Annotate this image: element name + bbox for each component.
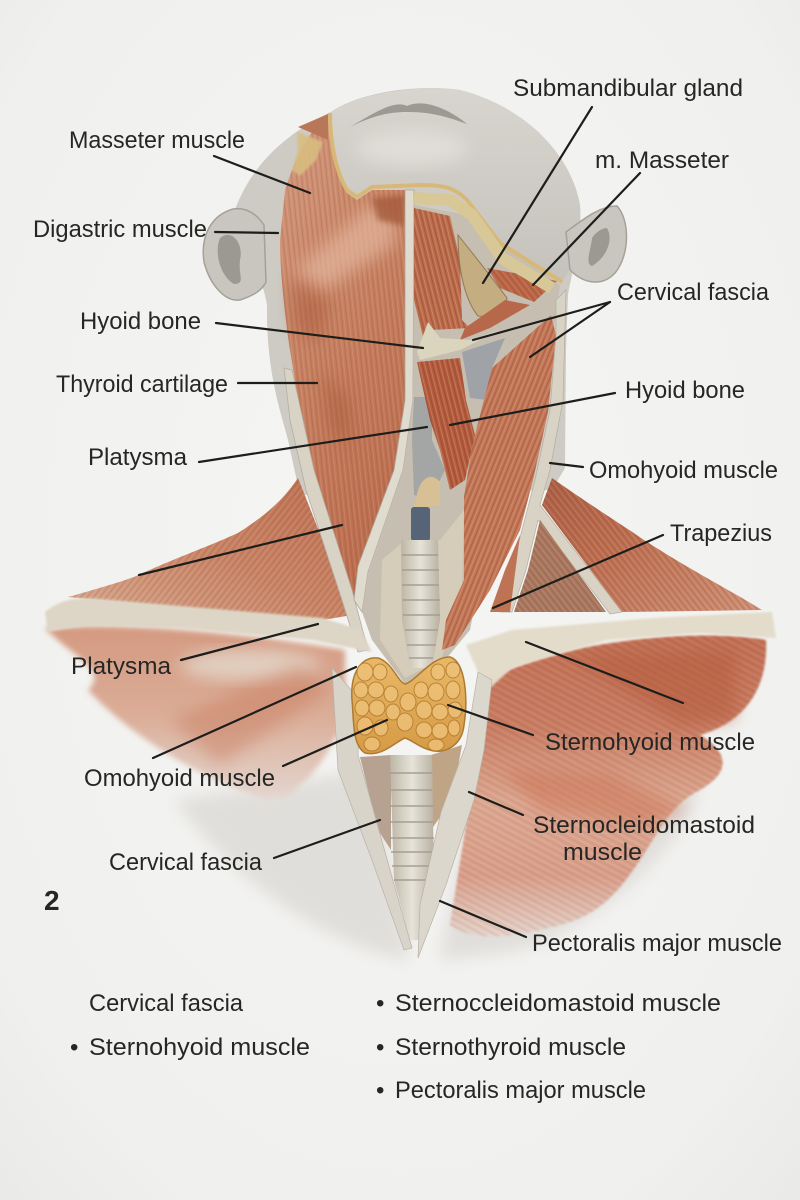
thyroid lobules	[354, 662, 462, 751]
lower trachea rings	[390, 773, 434, 880]
jaw dark shading	[372, 195, 405, 226]
submandibular gland	[458, 235, 507, 316]
head skin	[233, 88, 580, 495]
strap muscles	[417, 358, 475, 490]
central cavity	[362, 205, 560, 684]
lower lip shading	[350, 103, 467, 127]
label: Thyroid cartilage: Thyroid cartilage	[56, 371, 228, 398]
mandible edge stripe	[330, 113, 562, 282]
label: Platysma upper: Platysma	[88, 444, 188, 471]
label: Masseter muscle: Masseter muscle	[69, 127, 245, 154]
lower trachea side tissue right	[431, 745, 462, 830]
lower chest grey shading	[175, 770, 700, 960]
label: Hyoid bone right: Hyoid bone	[625, 377, 745, 404]
legend left column: Sternohyoid muscle	[89, 1034, 310, 1061]
figure number: 2	[44, 885, 60, 916]
jaw edge muscle	[487, 268, 557, 302]
label: Hyoid bone left: Hyoid bone	[80, 308, 201, 335]
right neck fascia	[500, 290, 622, 614]
label: Sternocleidomastoid muscle	[533, 812, 755, 866]
deep triangle	[514, 520, 606, 612]
trapezius	[542, 478, 762, 612]
right ear	[566, 206, 627, 282]
legend left column: •	[70, 1034, 78, 1061]
chin highlight	[357, 130, 467, 166]
label: Platysma lower: Platysma	[71, 653, 172, 680]
left neck muscle	[280, 113, 408, 612]
right chest muscle	[450, 636, 766, 937]
legend right column: •	[376, 1034, 384, 1061]
legend right column: •	[376, 1077, 384, 1104]
right chest mid band	[500, 770, 690, 825]
label: Trapezius: Trapezius	[670, 520, 772, 547]
mandible inner stripe	[414, 198, 552, 288]
legend right column: Sternoccleidomastoid muscle	[395, 990, 721, 1017]
grey thyroid cartilage	[462, 338, 505, 400]
neck dark shading	[290, 280, 350, 450]
label: Submandibular gland: Submandibular gland	[513, 75, 743, 102]
left ear	[203, 209, 266, 300]
legend left column	[70, 990, 310, 1061]
legend right column: •	[376, 990, 384, 1017]
right sternomastoid	[442, 315, 556, 650]
legend right column	[376, 990, 721, 1104]
left neck fascia band	[284, 368, 368, 652]
right chest deep band	[570, 650, 735, 725]
mid muscle slip	[460, 300, 530, 340]
leader lines	[139, 107, 683, 937]
left sternal fascia	[332, 668, 412, 950]
digastric gold patch	[292, 132, 323, 176]
chin panel	[330, 88, 580, 282]
label: Omohyoid muscle left: Omohyoid muscle	[84, 765, 275, 792]
label: Sternocleidomastoid muscle: Sternocleidomastoid	[533, 812, 755, 839]
label: m. Masseter: m. Masseter	[595, 147, 729, 174]
label: Omohyoid muscle right: Omohyoid muscle	[589, 457, 778, 484]
label: Digastric muscle: Digastric muscle	[33, 216, 207, 243]
legend right column: Sternothyroid muscle	[395, 1034, 626, 1061]
label: Cervical fascia left: Cervical fascia	[109, 849, 263, 876]
hyoid bone	[417, 322, 500, 360]
central vertical fascia	[354, 190, 414, 612]
label: Sternohyoid muscle: Sternohyoid muscle	[545, 729, 755, 756]
left clavicle band	[45, 598, 372, 652]
left chest muscle	[45, 626, 345, 800]
thyroid gland	[352, 657, 466, 754]
left chest stripe	[170, 665, 330, 765]
legend left column: Cervical fascia	[89, 990, 244, 1017]
upper trachea rings	[402, 555, 440, 658]
lower trachea side tissue	[360, 755, 391, 850]
inner pale tissue	[380, 510, 464, 678]
small red patch	[298, 114, 328, 140]
upper central muscle	[414, 208, 470, 345]
small muscle beside sternomastoid	[490, 535, 520, 612]
label: Pectoralis major muscle: Pectoralis major muscle	[532, 930, 782, 957]
neck highlight band	[295, 205, 395, 290]
right clavicle band	[466, 612, 776, 688]
anatomical illustration	[45, 88, 776, 960]
right sternal fascia	[418, 672, 492, 958]
left chest pale patch	[180, 649, 320, 681]
legend right column: Pectoralis major muscle	[395, 1077, 646, 1104]
upper trachea	[401, 540, 440, 668]
lower trachea	[390, 755, 434, 940]
label: Cervical fascia right: Cervical fascia	[617, 279, 770, 306]
label: Sternocleidomastoid muscle: muscle	[563, 839, 642, 866]
blue tube	[411, 507, 430, 541]
left shoulder muscle	[68, 478, 352, 620]
grey larynx	[412, 397, 445, 500]
cricoid cartilage	[412, 477, 440, 510]
